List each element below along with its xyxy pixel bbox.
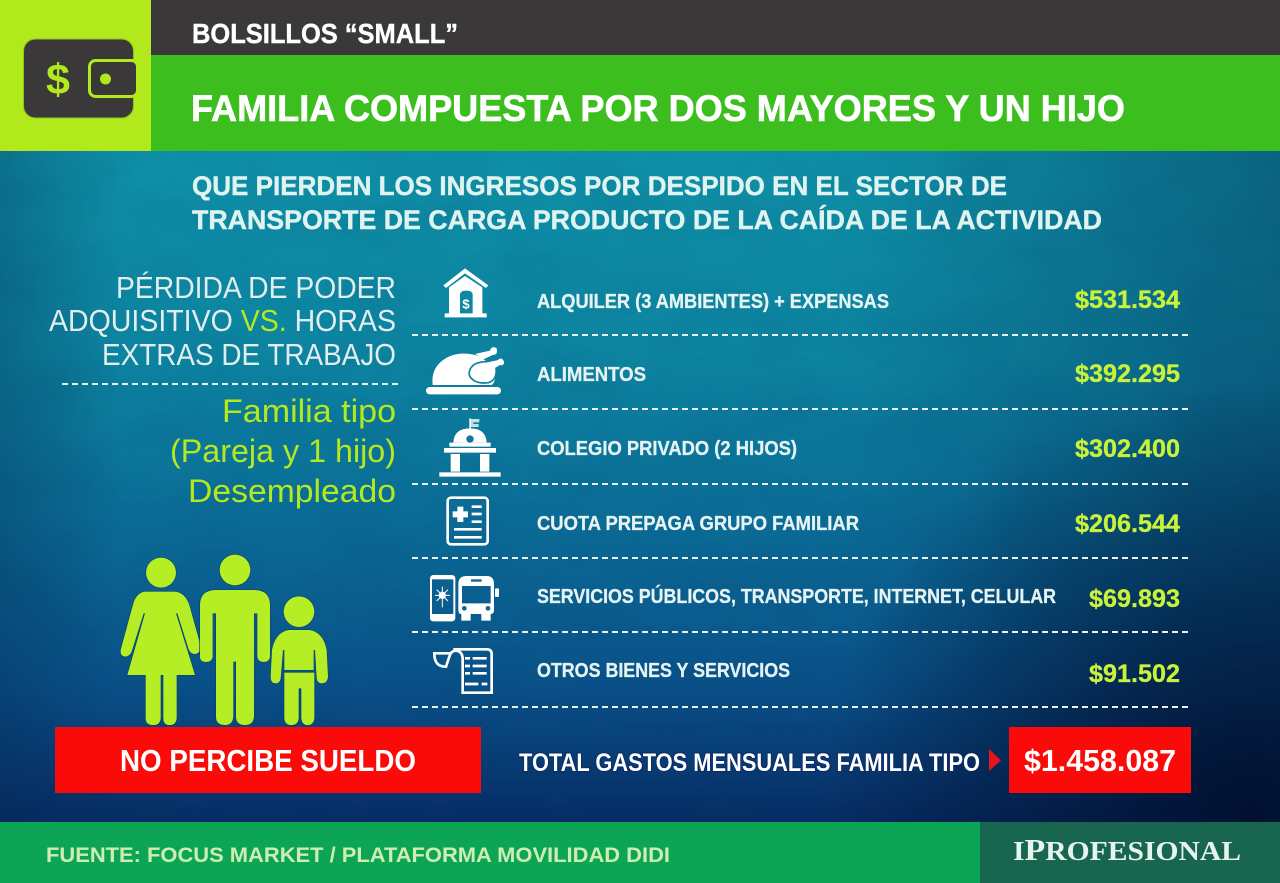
row: prepaga: CUOTA PREPAGA GRUPO FAMILIAR [537,513,860,535]
row: servicios: SERVICIOS PÚBLICOS, TRANSPORTE, INTERNET, CELULAR [537,584,1056,608]
icon: phone and bus [431,576,499,621]
row: prepaga [448,498,1180,544]
icon: roast chicken [426,347,505,394]
icon: school building [439,418,501,477]
row: otros: OTROS BIENES Y SERVICIOS [537,660,790,682]
header band [0,0,1280,151]
total value [1009,727,1191,793]
row: alimentos: $392.295 [1075,360,1180,388]
row: alimentos [426,347,1180,394]
heading: bolsillos small: BOLSILLOS “SMALL” [192,18,458,49]
row: otros: $91.502 [1089,660,1180,688]
text block: familia tipo [170,393,396,509]
icon: wallet [24,39,138,118]
background panel [0,151,1280,822]
text block: poder adquisitivo: PÉRDIDA DE PODER [116,270,396,305]
icon: house [443,268,488,317]
subheading [192,171,1102,235]
row: servicios: $69.893 [1089,585,1180,613]
icon: family [121,555,328,725]
callout: no percibe sueldo [55,727,481,793]
row: colegio [439,418,1180,477]
row: alquiler: $531.534 [1075,286,1180,314]
icon: wallet: $ [46,56,70,104]
title: FAMILIA COMPUESTA POR DOS MAYORES Y UN HIJO [191,88,1125,129]
row: alimentos: ALIMENTOS [537,364,646,386]
total value: $1.458.087 [1024,743,1176,778]
icon: receipt [434,649,492,693]
text block: familia tipo: Familia tipo [222,393,396,429]
row: prepaga: $206.544 [1075,510,1180,538]
row: servicios [431,576,1180,621]
text block: familia tipo: Desempleado [188,473,396,509]
text block: poder adquisitivo: ADQUISITIVO VS. HORAS [49,303,396,338]
source: FUENTE: FOCUS MARKET / PLATAFORMA MOVILIDAD DIDI [46,844,670,867]
footer band [0,822,1280,883]
icon: house: $ [462,296,470,311]
callout: no percibe sueldo: NO PERCIBE SUELDO [120,743,416,778]
text block: poder adquisitivo [49,270,396,372]
subheading: QUE PIERDEN LOS INGRESOS POR DESPIDO EN EL SECTOR DE [192,171,1007,201]
subheading: TRANSPORTE DE CARGA PRODUCTO DE LA CAÍDA DE LA ACTIVIDAD [192,204,1102,235]
row: colegio: $302.400 [1075,435,1180,463]
row: alquiler [443,268,1180,317]
logo: IPROFESIONAL [1013,832,1241,867]
row: alquiler: ALQUILER (3 AMBIENTES) + EXPENSAS [537,291,889,313]
arrow [989,749,1001,771]
row: colegio: COLEGIO PRIVADO (2 HIJOS) [537,438,797,460]
text block: familia tipo: (Pareja y 1 hijo) [170,433,396,469]
row: otros [434,649,1180,693]
text block: poder adquisitivo: EXTRAS DE TRABAJO [102,337,396,372]
total label: TOTAL GASTOS MENSUALES FAMILIA TIPO [519,749,980,777]
icon: medical chart [448,498,488,544]
